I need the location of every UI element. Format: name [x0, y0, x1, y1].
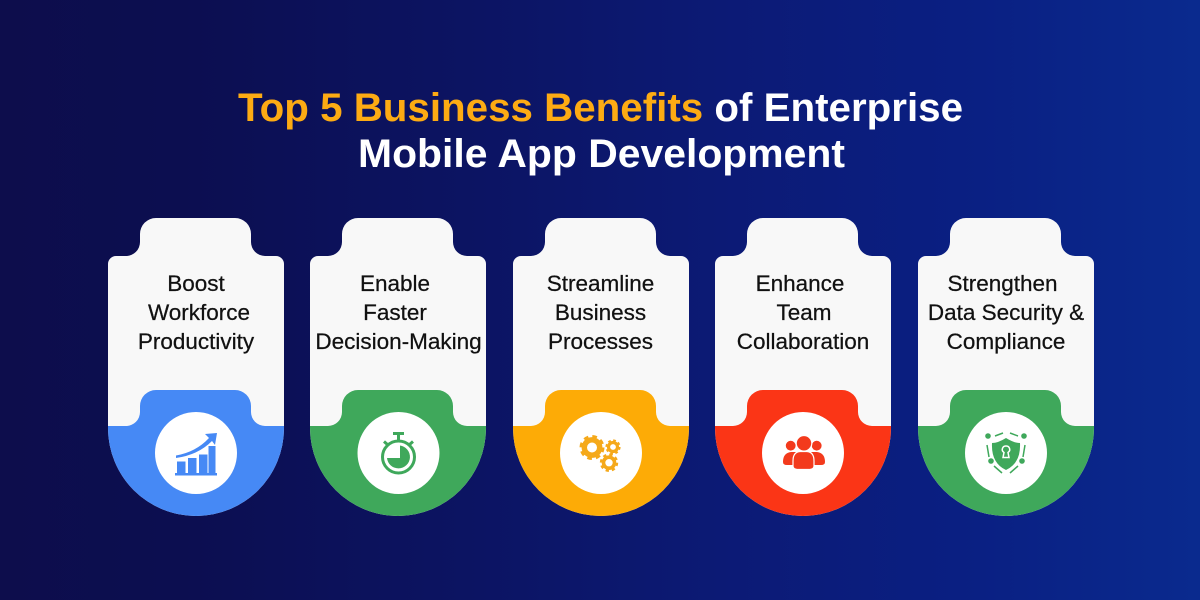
- card label: Productivity: [138, 329, 255, 354]
- card label: Data Security &: [928, 300, 1084, 325]
- panel: strengthen data security and compliance: [918, 218, 1094, 516]
- card label: Decision-Making: [315, 329, 482, 354]
- card label: Enable: [360, 271, 430, 296]
- card label: [315, 271, 482, 354]
- panel: enhance team collaboration: [715, 218, 891, 516]
- icon: team: [762, 412, 844, 494]
- card label: Workforce: [148, 300, 250, 325]
- title: Top 5 Business Benefits of Enterprise: [238, 86, 963, 130]
- icon: growth chart: [155, 412, 237, 494]
- card label: [138, 271, 255, 354]
- icon: stopwatch: [358, 412, 440, 494]
- card label: Boost: [167, 271, 226, 296]
- card label: Team: [776, 300, 832, 325]
- card label: [737, 271, 869, 354]
- panel: streamline business processes: [513, 218, 689, 516]
- panel: boost workforce productivity: [108, 218, 284, 516]
- card label: Faster: [363, 300, 427, 325]
- card label: [928, 271, 1084, 354]
- icon: gears: [560, 412, 642, 494]
- card label: Streamline: [547, 271, 654, 296]
- card label: Compliance: [947, 329, 1065, 354]
- card label: Business: [555, 300, 646, 325]
- card label: Strengthen: [947, 271, 1058, 296]
- title: Mobile App Development: [358, 132, 845, 176]
- card label: Enhance: [756, 271, 844, 296]
- icon: shield with keyhole: [965, 412, 1047, 494]
- card label: Processes: [548, 329, 653, 354]
- card label: [547, 271, 654, 354]
- card label: Collaboration: [737, 329, 869, 354]
- title: [238, 86, 963, 176]
- panel: enable faster decision-making: [310, 218, 486, 516]
